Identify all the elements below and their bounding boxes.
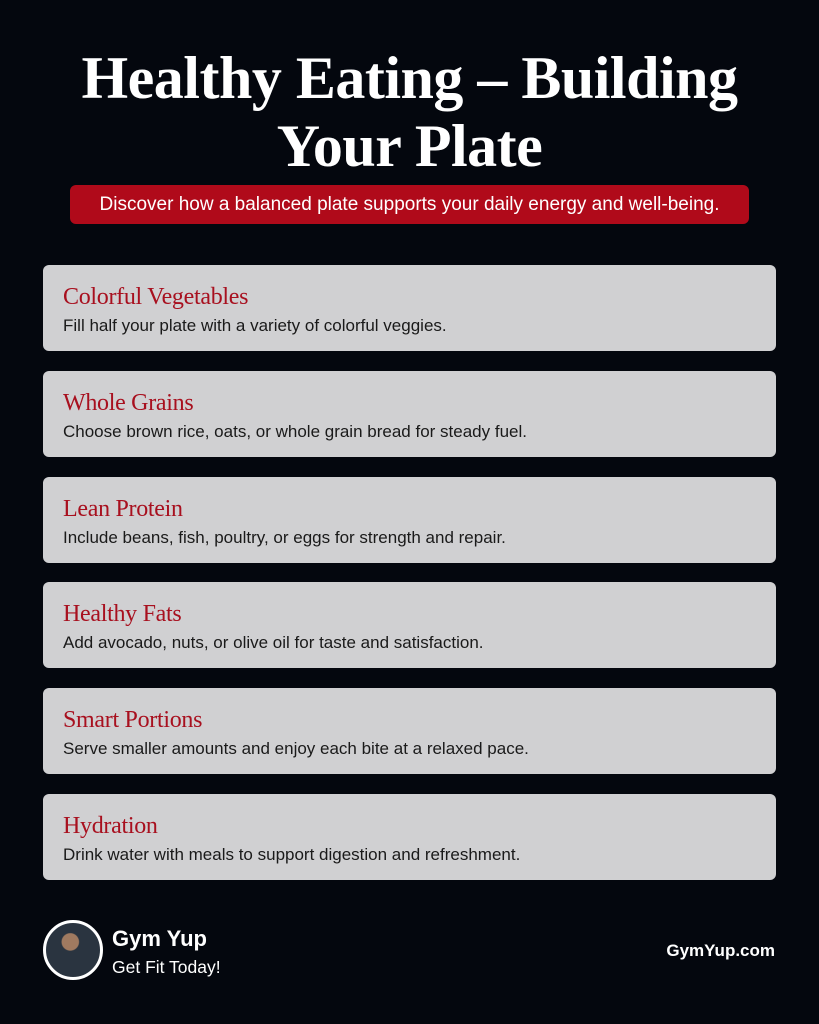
title [82, 45, 738, 179]
avatar icon [43, 920, 103, 980]
banner subtitle: Discover how a balanced plate supports your daily energy and well-being. [100, 194, 719, 215]
card: hydration: Hydration [63, 813, 158, 839]
card: portions: Serve smaller amounts and enjoy each bite at a relaxed pace. [63, 739, 529, 758]
card: fats [43, 582, 776, 668]
title: Your Plate [277, 113, 542, 179]
card: vegetables [43, 265, 776, 351]
brand name: Gym Yup [112, 926, 207, 951]
card: protein [43, 477, 776, 563]
card: fats: Add avocado, nuts, or olive oil for taste and satisfaction. [63, 633, 484, 652]
card: protein: Include beans, fish, poultry, or eggs for strength and repair. [63, 528, 506, 547]
card: grains: Choose brown rice, oats, or whole grain bread for steady fuel. [63, 422, 527, 441]
card: protein: Lean Protein [63, 496, 183, 522]
card: vegetables: Colorful Vegetables [63, 284, 248, 310]
card: hydration: Drink water with meals to support digestion and refreshment. [63, 845, 520, 864]
card: vegetables: Fill half your plate with a variety of colorful veggies. [63, 316, 447, 335]
card: portions [43, 688, 776, 774]
website: GymYup.com [666, 941, 775, 960]
card: grains: Whole Grains [63, 390, 193, 416]
banner subtitle [70, 185, 749, 224]
title: Healthy Eating – Building [82, 45, 738, 111]
card: hydration [43, 794, 776, 880]
card: portions: Smart Portions [63, 707, 202, 733]
card: fats: Healthy Fats [63, 601, 181, 627]
tagline: Get Fit Today! [112, 957, 221, 977]
card: grains [43, 371, 776, 457]
